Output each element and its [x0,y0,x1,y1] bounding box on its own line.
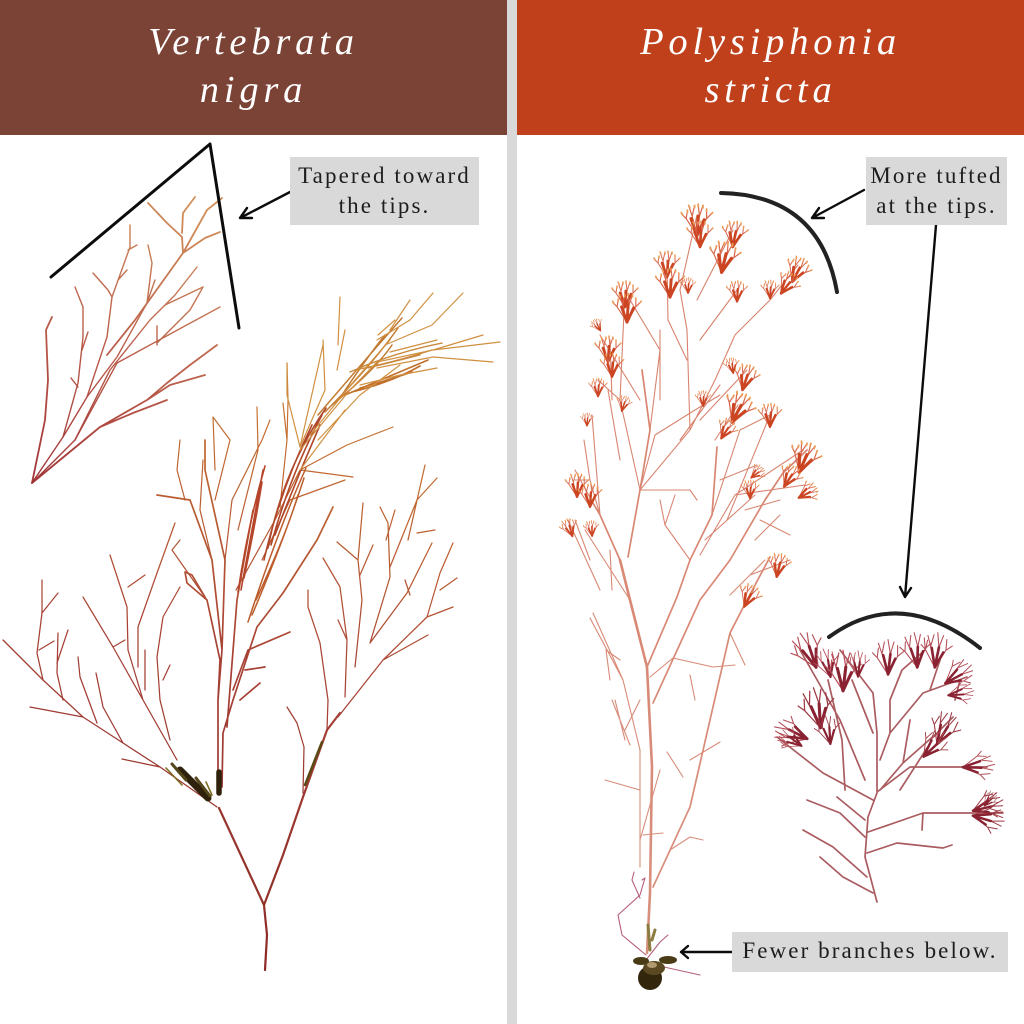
upper branches [598,215,798,515]
axes and branches [777,650,1003,902]
tufts [769,626,1008,835]
basal dark masses [166,742,322,798]
left branch group [3,580,217,807]
heading: Polysiphonia stricta: stricta [704,69,836,111]
thick bundles [238,466,265,592]
right branch group [287,465,457,793]
specimen: small Polysiphonia stricta [769,626,1008,902]
centre branch group [157,440,333,793]
tufts: large Polysiphonia stricta [558,204,825,612]
callout: tufted: at the tips. [876,193,997,218]
specimen: large Vertebrata nigra [3,293,500,970]
top tips [287,293,500,470]
arrow: to tapered tips [240,192,290,218]
callout: fewer branches [732,932,1008,972]
heading: Vertebrata nigra [0,0,507,135]
heading: Vertebrata nigra: nigra [200,69,307,111]
annotation: tuft arc upper [721,193,837,292]
callout: tufted: More tufted [870,163,1003,188]
callout: tapered: the tips. [339,193,430,218]
stem and main fork [219,713,340,970]
annotation: tapered outline [51,144,239,328]
heading: Vertebrata nigra: Vertebrata [148,21,359,63]
specimen: large Polysiphonia stricta [568,215,807,953]
callout: tapered: Tapered toward [298,163,471,188]
callout: fewer branches: Fewer branches below. [742,938,998,963]
heading: Polysiphonia stricta: Polysiphonia [640,21,901,63]
lower twigs [590,613,745,867]
main axes [620,560,652,953]
specimen: small Vertebrata nigra branch [32,197,222,483]
arrow: down to lower tuft arc [900,225,936,597]
callout: tapered [290,157,479,225]
annotation: tuft arc lower [829,613,980,648]
arrow: to base [681,946,732,958]
divider between panels [507,0,517,1024]
callout: tufted [866,157,1007,225]
base of Polysiphonia stricta [618,872,700,990]
arrow: to upper tuft arc [812,190,864,218]
heading: Polysiphonia stricta [517,0,1024,135]
